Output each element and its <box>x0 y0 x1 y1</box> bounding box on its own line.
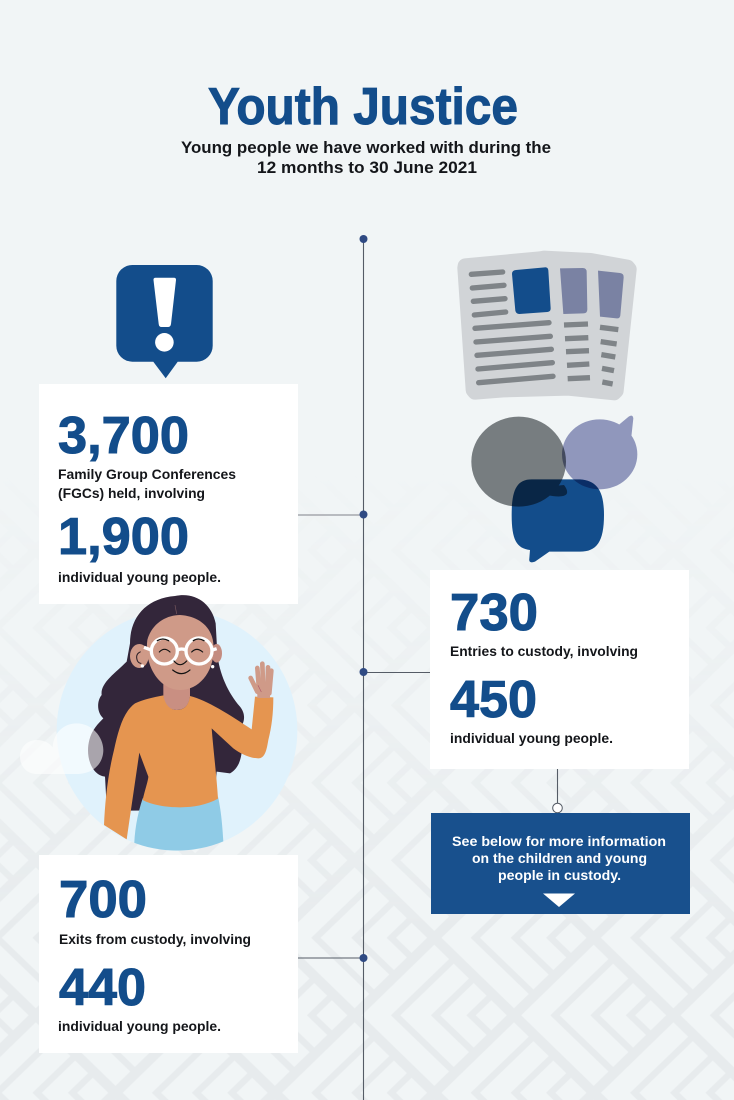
panel: family group conferences <box>39 384 298 604</box>
cloud <box>20 723 103 774</box>
hair <box>88 595 244 811</box>
waving hand <box>251 664 271 694</box>
panel: exits from custody: 700 <box>59 871 147 929</box>
subtitle: 12 months to 30 June 2021 <box>257 158 477 177</box>
sweater <box>104 695 273 839</box>
neck <box>163 684 190 710</box>
callout: more information <box>431 813 690 914</box>
icon: speech bubbles <box>471 416 637 562</box>
icon: alert speech bubble <box>116 265 213 378</box>
illustration: waving girl <box>20 595 297 853</box>
panel: family group conferences: 3,700 <box>58 407 189 465</box>
callout: more information: See below for more information <box>452 833 666 849</box>
title: Youth Justice <box>208 78 518 136</box>
callout: more information: on the children and young <box>472 850 647 866</box>
panel: family group conferences: individual young people. <box>58 569 221 585</box>
icon: newspapers <box>465 258 629 393</box>
eyes and mouth <box>157 639 204 674</box>
panel: entries to custody: 730 <box>450 584 538 642</box>
panel: exits from custody <box>39 855 298 1053</box>
panel: exits from custody: 440 <box>59 959 146 1017</box>
panel: exits from custody: individual young people. <box>58 1018 221 1034</box>
earrings <box>141 664 144 668</box>
panel: family group conferences: (FGCs) held, involving <box>58 485 205 501</box>
panel: entries to custody <box>430 570 689 769</box>
glasses <box>144 638 217 664</box>
panel: exits from custody: Exits from custody, involving <box>59 931 251 947</box>
subtitle: Young people we have worked with during the <box>181 138 551 157</box>
skirt <box>134 797 224 853</box>
panel: family group conferences: Family Group Conferences <box>58 466 236 482</box>
callout: more information: people in custody. <box>498 867 621 883</box>
timeline <box>298 235 430 1100</box>
panel: entries to custody: Entries to custody, involving <box>450 643 638 659</box>
panel: entries to custody: 450 <box>450 671 537 729</box>
face <box>147 615 214 690</box>
subtitle <box>181 138 551 177</box>
connector to callout <box>553 769 562 813</box>
panel: entries to custody: individual young people. <box>450 730 613 746</box>
panel: family group conferences: 1,900 <box>58 508 189 566</box>
ears <box>130 644 149 668</box>
